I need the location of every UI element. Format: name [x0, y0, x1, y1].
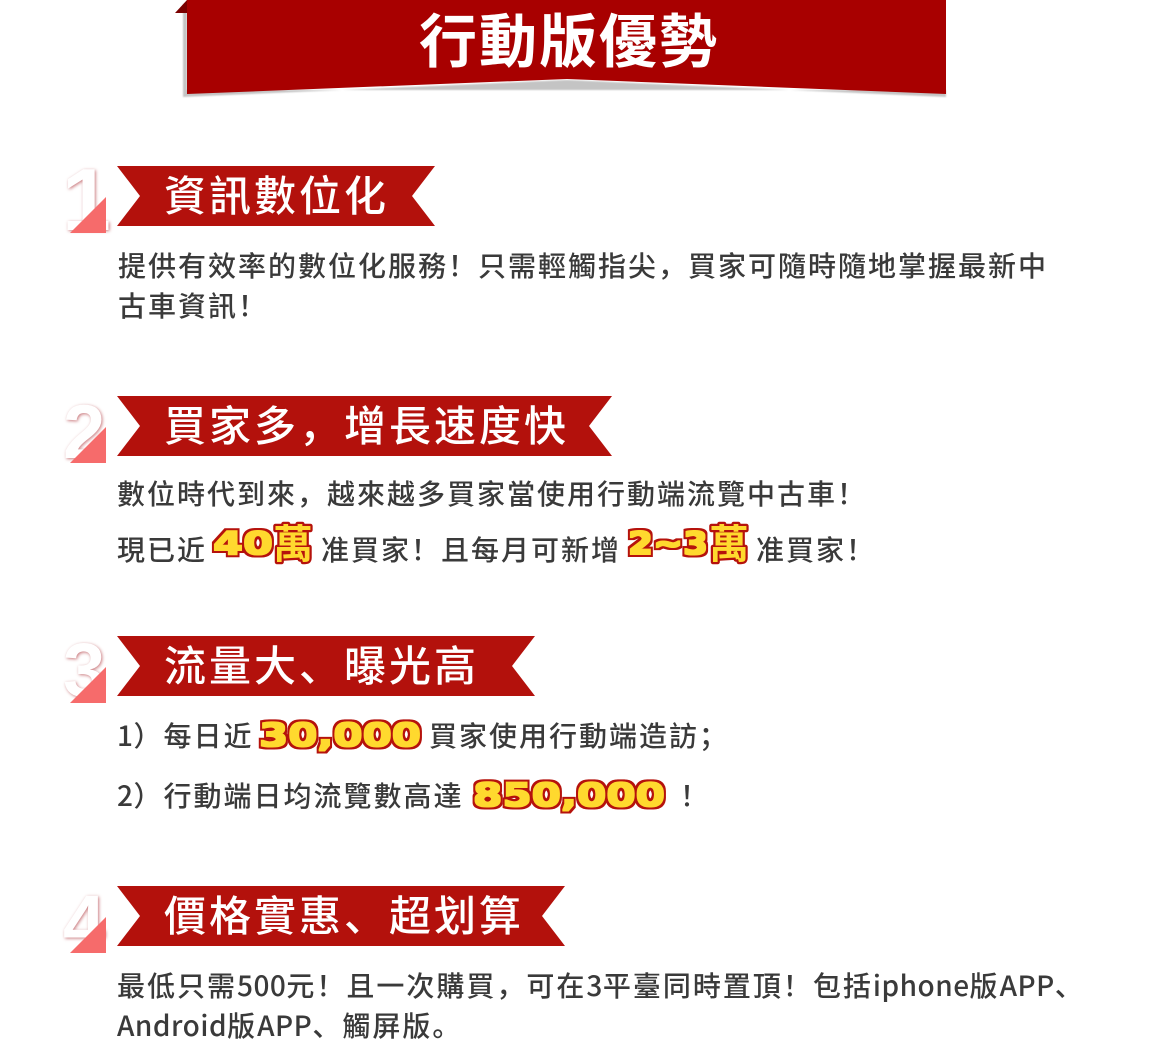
body text 2 line 1: 數位時代到來，越來越多買家當使用行動端流覽中古車！: [117, 473, 867, 513]
body text 1: 提供有效率的數位化服務！只需輕觸指尖，買家可隨時隨地掌握最新中: [118, 245, 1048, 285]
heading 4 text: 價格實惠、超划算: [164, 883, 524, 944]
title banner: [175, 0, 947, 98]
body text 3 line 2a: 2）行動端日均流覽數高達: [117, 775, 463, 815]
number badge 2: 2: [63, 390, 105, 475]
body text 3 line 2b: ！: [680, 775, 710, 815]
highlight: 40萬: 40: [213, 526, 273, 562]
section 2: [63, 390, 876, 570]
body text 2 line 2a: 現已近: [117, 529, 207, 569]
heading 2 text: 買家多，增長速度快: [164, 393, 569, 454]
ribbon heading 2: [117, 396, 612, 456]
highlight: 40萬: [212, 512, 313, 570]
number badge 4: 4: [63, 880, 105, 965]
heading 1 text: 資訊數位化: [164, 163, 389, 224]
section 1: [62, 150, 1048, 325]
body text 4: [117, 965, 1085, 1040]
highlight: 2~3萬: [628, 512, 749, 570]
ribbon heading 4: [117, 886, 565, 946]
body text 1: [118, 245, 1048, 325]
ribbon heading 3: [117, 636, 535, 696]
body text 2 line 2b: 准買家！且每月可新增: [321, 529, 621, 569]
heading 3 text: 流量大、曝光高: [164, 633, 479, 694]
highlight: 40萬: 萬: [273, 512, 313, 570]
body text 4: 最低只需500元！且一次購買，可在3平臺同時置頂！包括iphone版APP、: [117, 965, 1085, 1005]
highlight: 2~3萬: 萬: [709, 512, 749, 570]
number badge 3: 3: [63, 628, 105, 713]
section 3: [63, 628, 729, 815]
highlight: 30,000: 30,000: [259, 716, 421, 754]
body text 2 line 2c: 准買家！: [756, 529, 876, 569]
body text 3 line 1b: 買家使用行動端造訪；: [429, 715, 729, 755]
highlight: 850,000: 850,000: [473, 776, 665, 814]
section 4: [62, 880, 1085, 1040]
highlight: 2~3萬: 2~3: [628, 526, 708, 562]
ribbon heading 1: [117, 166, 435, 226]
body text 3 line 1a: 1）每日近: [117, 715, 253, 755]
number badge 1: 1: [62, 150, 111, 249]
body text 1: 古車資訊！: [118, 285, 268, 325]
